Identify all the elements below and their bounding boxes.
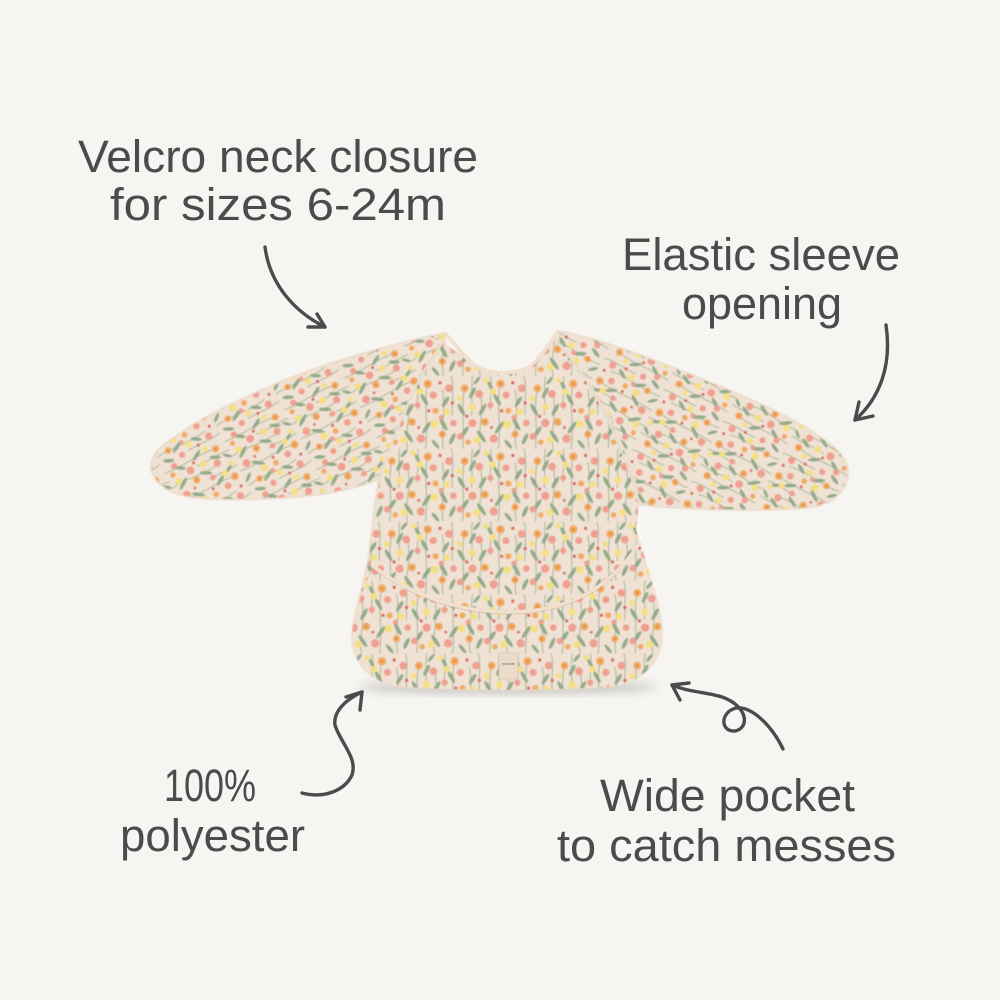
heading: wide pocket [557,770,896,871]
arrow: to neck closure [265,247,325,327]
heading: velcro neck closure: for sizes 6-24m [110,179,446,230]
right sleeve [552,331,848,510]
neck trim [445,331,558,373]
heading: 100% polyester: 100% [164,760,256,811]
heading: velcro neck closure: Velcro neck closure [78,131,478,182]
right side gap [636,506,641,540]
brand label [499,653,518,679]
heading: velcro neck closure [78,131,478,230]
heading: elastic sleeve opening [622,229,900,329]
bib shadow [358,681,658,693]
sleeve seams [378,340,640,505]
heading: 100% polyester: polyester [120,810,305,861]
heading: elastic sleeve opening: opening [682,278,842,329]
heading: elastic sleeve opening: Elastic sleeve [622,229,900,280]
bib body [352,340,662,690]
arrow: to polyester fabric [302,692,362,795]
heading: wide pocket: Wide pocket [600,770,855,821]
heading: wide pocket: to catch messes [557,820,896,871]
pocket [352,542,662,690]
left sleeve [151,333,445,500]
pocket trim [373,542,640,614]
arrow: to pocket [672,683,783,749]
brand label: mushie [502,661,516,666]
heading: 100% polyester [120,760,305,861]
bib illustration [151,331,848,693]
arrow: to sleeve opening [855,325,888,420]
